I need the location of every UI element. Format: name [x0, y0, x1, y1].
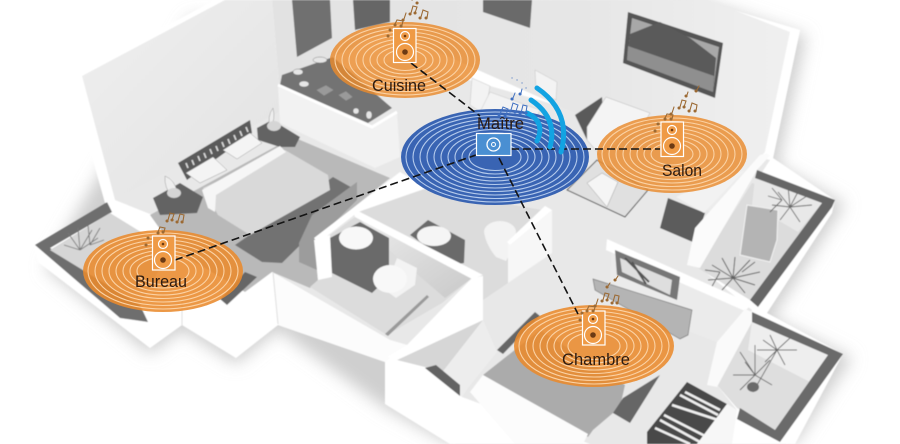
picture landscape [623, 12, 723, 98]
icon: Chambre music notes [580, 276, 619, 320]
left balcony floor [50, 213, 170, 305]
plant mid balcony [705, 257, 760, 293]
icon: Cuisine speaker [394, 28, 416, 62]
chambre bed [483, 330, 625, 437]
icon: Bureau music notes [146, 213, 184, 245]
door left [292, 0, 332, 57]
lower balcony back wall [748, 322, 828, 382]
right wall top strip [765, 30, 800, 158]
wall top strip [70, 0, 225, 78]
icon: Cuisine music notes [388, 0, 428, 36]
pillow left [186, 157, 227, 183]
small corner table [425, 365, 460, 396]
blue ripple disc [401, 109, 589, 205]
bedside table right [257, 108, 300, 147]
right stub wall [507, 206, 552, 283]
label: Salon: Salon [662, 162, 702, 180]
front bathroom wall [272, 272, 407, 362]
inner lower room wall [397, 320, 483, 375]
left balcony frame [35, 202, 148, 322]
armchair [740, 205, 778, 262]
white wall corner band [387, 300, 483, 360]
orange ripple disc Bureau [83, 230, 243, 312]
left bedroom wall [82, 0, 279, 200]
picture top [483, 0, 532, 28]
first bathroom floor [310, 217, 472, 335]
orange ripple disc Cuisine [330, 22, 480, 98]
lower balcony floor [717, 322, 828, 430]
first bathroom vanity [330, 222, 389, 293]
toilet [373, 258, 417, 298]
step line [385, 295, 429, 336]
link to Cuisine [411, 63, 480, 116]
back living wall [272, 0, 790, 212]
bed mattress [203, 150, 330, 235]
second bathroom floor [360, 180, 542, 300]
plant left balcony [64, 225, 104, 250]
orange ripple disc Salon [597, 115, 747, 193]
pillow right [223, 133, 262, 159]
lower room light floor [425, 320, 497, 397]
bench white surround [697, 404, 737, 444]
upper balcony back wall [752, 178, 822, 232]
ripple rings Cuisine [335, 25, 475, 95]
tv stand [593, 279, 692, 339]
orange ripple disc Chambre [514, 305, 674, 387]
chambre rug left [497, 312, 540, 354]
icon: Chambre speaker [582, 311, 605, 345]
coffee table [567, 160, 648, 217]
chair box and partition [299, 182, 357, 270]
zone: Chambre [514, 305, 674, 387]
bed sheet fold [202, 146, 286, 212]
bedroom wood floor [150, 137, 390, 292]
icon: Salon speaker [661, 122, 684, 156]
bedroom front partition [707, 309, 752, 387]
icon: blue music notes [499, 78, 527, 116]
wall left end strip [70, 76, 115, 203]
icon: Salon music notes [655, 86, 699, 131]
zone: Maître [401, 109, 589, 205]
upper balcony floor [698, 183, 822, 300]
label: Maître: Maître [477, 115, 524, 133]
door right [353, 0, 390, 30]
link to Bureau [175, 155, 476, 260]
icon: Bureau speaker [152, 236, 175, 270]
dark bench [647, 382, 727, 444]
ripple rings Salon [602, 118, 742, 190]
bedside table left [153, 176, 203, 215]
sofa dark arm [575, 97, 603, 140]
bedroom back wall [610, 250, 745, 342]
first bathroom back wall [358, 217, 472, 298]
plant lower balcony [733, 335, 797, 392]
chambre rug right [613, 375, 660, 423]
blue ripple rings [406, 112, 584, 202]
zone: Bureau [83, 230, 243, 312]
second bathroom vanity [410, 220, 465, 265]
first bathroom sink [339, 226, 373, 250]
link to Chambre [499, 158, 578, 314]
link to Salon [511, 148, 660, 150]
rug under bed [235, 177, 356, 263]
zone: Salon [597, 115, 747, 193]
ripple rings Bureau [88, 233, 238, 309]
chambre bed foot board [470, 375, 588, 444]
front wall creases [182, 272, 278, 325]
upper balcony frame [750, 170, 835, 307]
bathroom wall tops [314, 172, 483, 372]
second bathroom sink [417, 226, 451, 246]
lower balcony frame [737, 312, 843, 442]
basin [484, 221, 516, 261]
sofa [587, 97, 650, 155]
main floor [115, 60, 770, 444]
zone: Cuisine [330, 22, 480, 98]
icon: wifi waves [527, 88, 564, 152]
kitchen counter top [280, 57, 392, 123]
kitchen block wall [278, 87, 400, 168]
connection lines [175, 63, 660, 314]
label: Cuisine: Cuisine [372, 77, 426, 95]
lower sofa [660, 170, 745, 243]
right small dark ledge [220, 272, 257, 305]
plant upper balcony [768, 186, 812, 222]
ripple rings Chambre [519, 308, 669, 384]
table runner [587, 173, 618, 207]
tv [615, 250, 680, 300]
label: Chambre: Chambre [562, 351, 630, 369]
icon: master device [476, 134, 511, 156]
right partition wall [687, 152, 773, 268]
headboard [178, 120, 252, 180]
dining area [470, 70, 557, 130]
label: Bureau: Bureau [135, 273, 187, 291]
kitchen counter items [293, 57, 372, 119]
